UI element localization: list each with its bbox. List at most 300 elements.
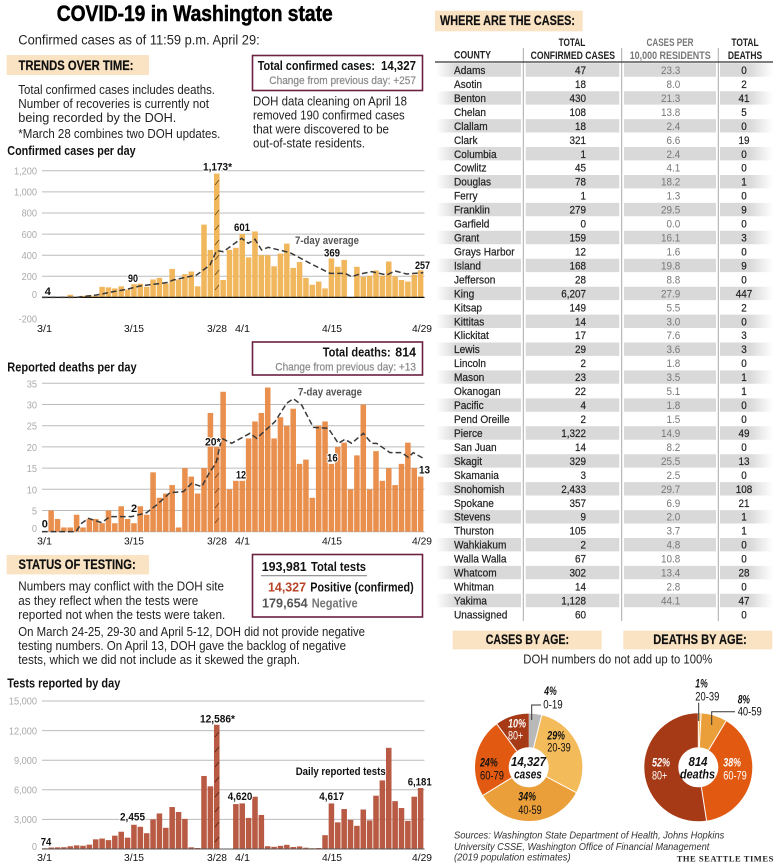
data labels: 74 [41, 837, 52, 849]
slice label: 80+: 52% [652, 758, 670, 770]
row: Snohomish: 29.7 [661, 484, 680, 496]
callout: total confirmed cases: Change from previous day: +257 [269, 75, 416, 87]
text block: testing notes: as they reflect when the tests were [18, 593, 198, 608]
data labels: 20* [205, 436, 221, 448]
row: Spokane: 6.9 [667, 498, 680, 510]
row: Grays Harbor: 12 [575, 247, 586, 259]
line: 7-day average [42, 399, 423, 532]
text block: testing notes: On March 24-25, 29-30 and April 5-12, DOH did not provide negative [18, 624, 365, 639]
row: Skamania: Skamania [454, 469, 499, 482]
row: Franklin: Franklin [454, 204, 490, 217]
row: Unassigned: 60 [575, 610, 586, 622]
data labels: 4,620 [228, 791, 252, 803]
row: Chelan: 5 [741, 107, 747, 119]
row: Columbia: Columbia [454, 148, 497, 161]
callout: test totals: 193,981 [262, 559, 307, 574]
row: Unassigned: Unassigned [454, 609, 507, 622]
row: Pierce: Pierce [454, 428, 483, 440]
row: Pacific: 1.8 [667, 401, 680, 412]
x axis labels: 3/15 [124, 323, 144, 335]
row: Grays Harbor: Grays Harbor [454, 246, 515, 259]
row: Yakima: Yakima [454, 595, 487, 608]
row: Thurston: 1 [741, 526, 747, 538]
x axis labels: 3/28 [207, 323, 227, 335]
subtitle: Confirmed cases as of 11:59 p.m. April 29: [18, 32, 260, 47]
bar chart: tests reported by day [9, 696, 432, 864]
row: Walla Walla: 10.8 [661, 554, 680, 566]
row: Thurston [454, 525, 747, 538]
row: Skagit: 329 [570, 456, 586, 468]
row: Snohomish: 108 [736, 484, 752, 496]
text block: testing notes: Numbers may conflict with the DOH site [18, 579, 224, 594]
y axis labels: 20 [27, 442, 38, 454]
data labels: 6,181 [408, 776, 432, 788]
slice label: 80+: 10% [508, 718, 526, 730]
row: Pierce: 1,322 [561, 429, 586, 440]
row: Adams: Adams [454, 65, 485, 77]
data labels: 1,173* [203, 162, 233, 174]
row: Thurston: 3.7 [667, 526, 680, 538]
row: Columbia: 1 [581, 149, 586, 161]
line: 7-day average [42, 238, 423, 297]
chart heading: reported deaths per day: Reported deaths per day [7, 361, 137, 375]
row: Island: 19.8 [661, 261, 680, 273]
slice label: 80+ [652, 758, 670, 782]
x axis labels: 3/1 [37, 852, 52, 864]
y axis labels: 5 [32, 506, 38, 518]
donut chart: cases by age [479, 686, 576, 817]
slice label: 40-59 with leader [712, 694, 762, 725]
row: Whitman: 2.8 [667, 582, 680, 594]
row: Grant: 16.1 [661, 233, 680, 245]
y axis labels: 25 [27, 421, 38, 433]
callout: test totals: Total tests [311, 559, 366, 574]
row: Benton: 41 [739, 93, 750, 105]
row: Yakima [454, 595, 750, 608]
row: Ferry: 1 [581, 191, 586, 203]
row: Pierce [454, 428, 750, 440]
row: Grays Harbor: 1.6 [667, 247, 680, 259]
callout: test totals: Negative [312, 597, 358, 611]
row: Grays Harbor [454, 246, 747, 259]
y axis labels: 600 [22, 229, 38, 241]
row: Clallam: 18 [575, 121, 586, 133]
row: Clallam: 2.4 [667, 121, 680, 133]
donut chart: deaths by age [652, 678, 762, 821]
row: Okanogan [454, 386, 747, 398]
data labels: 2,455 [120, 812, 145, 824]
row: Douglas: 78 [575, 177, 586, 189]
table header [454, 37, 762, 62]
bar chart: reported deaths per day [27, 379, 432, 547]
data labels: 4 [45, 286, 52, 298]
row: Grant: Grant [454, 232, 479, 245]
row: Garfield: Garfield [454, 218, 489, 231]
row: Mason: Mason [454, 372, 484, 384]
row: Pacific: Pacific [454, 400, 484, 412]
row: Jefferson: 8.8 [667, 275, 680, 287]
row: Whatcom: Whatcom [454, 567, 497, 580]
row: Stevens: 1 [741, 512, 747, 524]
panel: county table [435, 37, 773, 622]
row: Douglas: 1 [741, 177, 747, 189]
row: Kittitas: 14 [575, 317, 586, 328]
slice label: 80+: 80+ [652, 770, 668, 782]
heading: status of testing: STATUS OF TESTING: [18, 557, 136, 572]
row: Stevens: 9 [581, 512, 586, 524]
x axis labels [37, 323, 432, 335]
callout: test totals: 179,654 [262, 596, 308, 611]
row: Yakima: 44.1 [661, 596, 680, 608]
x axis labels: 3/1 [37, 323, 52, 335]
row: Spokane: 357 [570, 498, 586, 510]
row: Grays Harbor: 0 [741, 247, 747, 259]
chart heading: tests reported by day: Tests reported by day [7, 676, 120, 690]
bars [48, 388, 423, 532]
x axis labels: 3/28 [207, 852, 227, 864]
row: Pierce: 49 [739, 429, 750, 440]
text block: DOH data cleaning note [253, 93, 407, 150]
data labels [42, 436, 430, 531]
row: Asotin: 8.0 [667, 80, 680, 91]
slice label: 40-59: 40-59 [518, 805, 542, 817]
row: Garfield: 0 [581, 219, 586, 231]
text block: sources: Sources: Washington State Department of Health, Johns Hopkins [454, 830, 725, 842]
row: Kittitas: Kittitas [454, 316, 484, 328]
row: Cowlitz: 45 [575, 163, 586, 175]
y axis labels: 10 [27, 485, 38, 496]
row: Ferry [454, 190, 747, 203]
table header: 10,000 RESIDENTS [630, 50, 711, 62]
row: Island: 168 [570, 261, 586, 273]
row: Franklin: 29.5 [661, 205, 680, 217]
text block: testing notes: testing numbers. On April 13, DOH gave the backlog of negative [18, 638, 346, 653]
slice label: 60-79: 60-79 [723, 770, 747, 782]
row: Franklin: 9 [741, 205, 747, 217]
row: Columbia: 2.4 [667, 149, 680, 161]
callout: total deaths [252, 342, 422, 375]
row: Pend Oreille: 0 [741, 415, 747, 426]
row: Kittitas: 3.0 [667, 317, 680, 328]
row: Whitman: 0 [741, 582, 747, 594]
row: Kittitas: 0 [741, 317, 747, 328]
row: Walla Walla: 0 [741, 554, 747, 566]
row: Jefferson: 0 [741, 275, 747, 287]
data labels: 601 [234, 222, 250, 234]
x axis labels: 4/29 [412, 852, 432, 864]
table header: TOTAL [559, 37, 586, 49]
slice label: 40-59 with leader: 40-59 [738, 707, 762, 719]
row: Cowlitz [454, 162, 747, 175]
row: Garfield: 0.0 [667, 219, 680, 231]
slice label: 0-19 with leader: 0-19 [543, 699, 563, 711]
row: Clark: 321 [570, 135, 586, 147]
table header: TOTAL [731, 37, 759, 49]
row: San Juan: San Juan [454, 442, 497, 454]
x axis labels [37, 535, 432, 547]
row: Kitsap: 149 [570, 303, 586, 314]
bars [42, 174, 423, 298]
row: Adams: 0 [741, 66, 747, 77]
row: Wahkiakum: 0 [741, 540, 747, 552]
center label: cases [514, 767, 542, 781]
row: Snohomish: Snohomish [454, 483, 505, 496]
row: Klickitat: 3 [741, 331, 747, 342]
row: Spokane [454, 497, 750, 510]
row: Ferry: Ferry [454, 190, 478, 203]
row: Cowlitz: 0 [741, 163, 747, 175]
row: Whatcom [454, 567, 750, 580]
row: San Juan: 8.2 [667, 442, 680, 454]
callout: total confirmed cases [252, 56, 422, 90]
text block: trends notes: Number of recoveries is currently not [18, 96, 209, 111]
row: Adams: 47 [575, 66, 586, 77]
row: Skagit [454, 456, 750, 468]
row: Asotin: Asotin [454, 79, 482, 91]
row: King: King [454, 288, 474, 301]
row: Skagit: Skagit [454, 456, 482, 468]
data labels: 13 [419, 464, 430, 476]
callout: test totals: Positive (confirmed) [310, 581, 414, 595]
row: Klickitat [454, 330, 747, 342]
text block: DOH data cleaning note: removed 190 confirmed cases [253, 107, 405, 122]
slice label: 60-79 [723, 758, 747, 782]
callout: total confirmed cases: Total confirmed cases: [258, 58, 375, 73]
row: Benton [454, 93, 750, 105]
heading: trends over time [7, 55, 149, 75]
row: Skamania [454, 469, 747, 482]
row: Wahkiakum: Wahkiakum [454, 539, 507, 552]
y axis labels: 400 [22, 250, 38, 262]
row: Clallam: Clallam [454, 120, 488, 133]
callout: total deaths: Total deaths: [323, 345, 391, 360]
heading: deaths by age [623, 631, 772, 649]
row: Lewis: Lewis [454, 344, 480, 356]
row: Okanogan: Okanogan [454, 386, 501, 398]
row: Mason [454, 372, 747, 384]
row: Jefferson [454, 274, 747, 287]
slice label: 20-39 [547, 730, 571, 755]
row: Wahkiakum [454, 539, 747, 552]
text block: testing notes: reported not when the tests were taken. [18, 607, 225, 622]
row: Chelan [454, 107, 747, 119]
row: Columbia: 0 [741, 149, 747, 161]
row: Chelan: Chelan [454, 107, 486, 119]
row: Kitsap: 5.5 [667, 303, 680, 314]
label: 7-day average: 7-day average [295, 235, 359, 247]
slice label: 0-19 with leader [532, 686, 563, 720]
row: Wahkiakum: 2 [581, 540, 586, 552]
row: Adams: 23.3 [661, 66, 680, 77]
row: San Juan [454, 442, 747, 454]
y axis labels: 0 [32, 842, 38, 853]
data labels: 16 [327, 453, 338, 465]
x axis labels [37, 852, 432, 864]
row: Chelan: 108 [570, 107, 586, 119]
row: Lewis: 29 [575, 345, 586, 356]
row: Cowlitz: 4.1 [667, 163, 680, 175]
row: Snohomish: 2,433 [561, 484, 586, 496]
text block: DOH data cleaning note: that were discovered to be [253, 121, 389, 136]
row: Skagit: 25.5 [661, 456, 680, 468]
row: Franklin: 279 [570, 205, 586, 217]
heading: deaths by age: DEATHS BY AGE: [653, 632, 747, 647]
row: Klickitat: 17 [575, 331, 586, 342]
row: Lewis [454, 344, 747, 356]
row: King [454, 288, 752, 301]
y axis labels: 0 [32, 290, 38, 301]
heading: trends over time: TRENDS OVER TIME: [18, 58, 134, 73]
heading: where are the cases: WHERE ARE THE CASES: [440, 13, 575, 28]
y axis labels: 15 [27, 464, 38, 475]
table header: CONFIRMED CASES [531, 50, 615, 62]
row: Garfield: 0 [741, 219, 747, 231]
table header: CASES PER [646, 37, 694, 49]
row: Clark [454, 134, 750, 147]
y axis labels: 3,000 [14, 815, 38, 826]
callout: total deaths: Change from previous day: +13 [275, 362, 416, 374]
row: Lincoln: 1.8 [667, 359, 680, 370]
data labels: 4,617 [319, 791, 344, 803]
row: Garfield [454, 218, 747, 231]
data labels: 12,586* [200, 714, 236, 726]
row: Island [454, 260, 747, 273]
slice label: 40-59: 34% [518, 792, 536, 804]
hatch on March 28 bar [215, 732, 219, 842]
row: Klickitat: Klickitat [454, 330, 489, 342]
y axis labels: -200 [19, 314, 38, 326]
hatch on March 28 bar [215, 458, 219, 523]
row: Pend Oreille [454, 414, 747, 426]
slice label: 60-79 [479, 758, 504, 782]
data labels: 12 [236, 470, 246, 482]
row: Lincoln: 0 [741, 359, 747, 370]
x axis labels: 4/29 [412, 535, 432, 547]
row: Pend Oreille: 2 [581, 415, 586, 426]
row: Jefferson: 28 [575, 275, 586, 287]
row: Clark: Clark [454, 134, 478, 147]
center label [511, 755, 547, 781]
center label [680, 755, 715, 781]
y axis labels: 9,000 [14, 755, 38, 767]
row: Whitman: 14 [575, 582, 586, 594]
row: Walla Walla: Walla Walla [454, 553, 507, 566]
y axis labels [27, 379, 38, 535]
row: Whitman [454, 581, 747, 594]
table header: DEATHS [728, 50, 762, 62]
row: Whatcom: 28 [739, 568, 750, 580]
row: Grant: 159 [570, 233, 586, 245]
bar chart: confirmed cases per day [14, 162, 432, 335]
row: Adams [454, 65, 747, 77]
credit: The Seattle Times: THE SEATTLE TIMES [677, 854, 774, 864]
slice label: 80+ [508, 718, 526, 742]
row: Whatcom: 13.4 [661, 568, 680, 580]
row: San Juan: 0 [741, 442, 747, 454]
row: Lewis: 3.6 [667, 345, 680, 356]
row: Island: Island [454, 260, 481, 273]
data labels: 2 [131, 503, 137, 515]
x axis labels: 4/1 [235, 852, 250, 864]
slice label: 60-79: 60-79 [480, 770, 504, 782]
row: Stevens: 2.0 [667, 512, 680, 524]
y axis labels: 12,000 [9, 726, 38, 737]
row: Unassigned [454, 609, 747, 622]
row: Thurston: 105 [570, 526, 586, 538]
text block: sources: (2019 population estimates) [454, 852, 571, 864]
row: King: 27.9 [661, 289, 680, 301]
note: DOH numbers: DOH numbers do not add up to 100% [523, 652, 712, 666]
callout: total confirmed cases: 14,327 [381, 58, 416, 73]
bars [42, 725, 423, 849]
y axis labels [9, 696, 38, 853]
row: King: 447 [736, 289, 752, 301]
row: Whitman: Whitman [454, 581, 494, 594]
row: Clark: 6.6 [667, 135, 680, 147]
row: Lincoln: 2 [581, 359, 586, 370]
y axis labels: 35 [27, 379, 38, 390]
row: Yakima: 47 [739, 596, 750, 608]
callout: total deaths: 814 [395, 345, 417, 360]
zero baseline [42, 296, 424, 298]
y axis labels: 1,000 [14, 187, 38, 199]
slice label: 0-19 with leader: 4% [544, 686, 557, 698]
row: Asotin [454, 79, 747, 91]
slice label: 20-39 with leader [695, 678, 719, 721]
row: Kitsap: Kitsap [454, 302, 482, 314]
row: Wahkiakum: 4.8 [667, 540, 680, 552]
row: Skamania: 2.5 [667, 470, 680, 482]
slice label: 20-39 with leader: 20-39 [695, 692, 719, 704]
callout: test totals [252, 554, 422, 617]
y axis labels: 1,200 [14, 166, 38, 178]
row: Mason: 23 [575, 373, 586, 384]
row: Pend Oreille: 1.5 [667, 415, 680, 426]
row: Okanogan: 5.1 [667, 387, 680, 398]
row: Thurston: Thurston [454, 525, 494, 538]
row: Benton: Benton [454, 93, 486, 105]
x axis labels: 3/15 [124, 535, 144, 547]
row: Douglas: Douglas [454, 176, 491, 189]
row: Stevens [454, 511, 747, 524]
text block: testing notes: tests, which we did not include as it skewed the graph. [18, 652, 300, 667]
x axis labels: 4/15 [322, 323, 342, 335]
table header: COUNTY [454, 50, 492, 62]
row: Skagit: 13 [739, 456, 750, 468]
x axis labels: 3/28 [207, 535, 227, 547]
row: Douglas: 18.2 [661, 177, 680, 189]
text block: DOH data cleaning note: out-of-state residents. [253, 135, 365, 150]
row: Lincoln [454, 358, 747, 370]
row: Columbia [454, 148, 747, 161]
slice label: 20-39: 20-39 [547, 743, 571, 755]
x axis labels: 4/29 [412, 323, 432, 335]
row: Pacific [454, 400, 747, 412]
row: Ferry: 1.3 [667, 191, 680, 203]
data labels: 257 [415, 260, 430, 272]
text block: trends notes [18, 82, 220, 141]
row: Yakima: 1,128 [561, 596, 586, 608]
data labels [45, 162, 430, 298]
x axis labels: 4/15 [322, 535, 342, 547]
row: Whatcom: 302 [570, 568, 586, 580]
y axis labels: 15,000 [9, 696, 38, 708]
zero baseline [42, 848, 424, 850]
row: Ferry: 0 [741, 191, 747, 203]
row: Chelan: 13.8 [661, 107, 680, 119]
y axis labels: 0 [32, 524, 38, 535]
x axis labels: 3/1 [37, 535, 52, 547]
